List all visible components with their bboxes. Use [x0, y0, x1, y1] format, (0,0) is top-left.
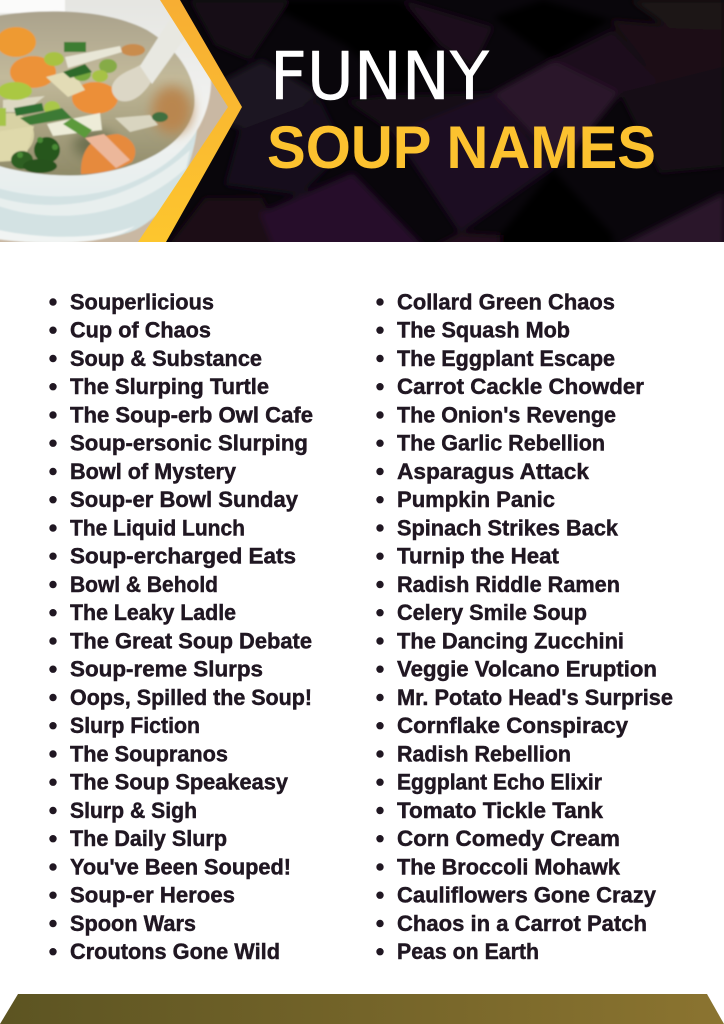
right list column: Radish Riddle Ramen: [397, 572, 620, 597]
left list column: Soup-ersonic Slurping: [70, 431, 308, 456]
left list column: Soup & Substance: [70, 346, 262, 371]
left list column: Cup of Chaos: [70, 318, 211, 343]
right list column: Cornflake Conspiracy: [397, 713, 629, 738]
left list column: [49, 290, 313, 964]
spoon: [110, 64, 151, 102]
left list column: Soup-ercharged Eats: [70, 544, 296, 569]
bowl lower body: [0, 130, 197, 241]
right list column: Carrot Cackle Chowder: [397, 374, 644, 399]
carrot slices: [0, 27, 36, 57]
right list column: [376, 290, 673, 964]
right list column: Mr. Potato Head's Surprise: [397, 685, 673, 710]
right list column: Collard Green Chaos: [397, 290, 615, 314]
right list column: Tomato Tickle Tank: [397, 798, 604, 823]
left list column: Bowl of Mystery: [70, 459, 237, 484]
cabbage pieces: [65, 46, 122, 68]
parsley: [11, 137, 60, 173]
right list column: Cauliflowers Gone Crazy: [397, 883, 657, 908]
right list column: Corn Comedy Cream: [397, 826, 620, 851]
right list column: The Dancing Zucchini: [397, 628, 624, 654]
right list column: The Squash Mob: [397, 318, 570, 343]
right list column: Radish Rebellion: [397, 742, 571, 766]
broth: [0, 11, 195, 175]
right list column: Asparagus Attack: [397, 459, 590, 484]
left list column: The Liquid Lunch: [70, 516, 245, 540]
title: Funny: FUNNY: [270, 38, 490, 115]
left list column: Oops, Spilled the Soup!: [70, 685, 312, 710]
left list column: Soup-er Heroes: [70, 883, 235, 908]
yellow chevron: [138, 0, 242, 242]
right list column: Peas on Earth: [397, 939, 539, 964]
left list column: The Soupranos: [70, 742, 228, 766]
green onions: [64, 42, 86, 52]
tabletop: [0, 79, 228, 242]
left list column: Croutons Gone Wild: [70, 939, 280, 964]
left list column: The Leaky Ladle: [70, 600, 236, 625]
footer band: [0, 994, 724, 1024]
left list column: The Soup Speakeasy: [70, 770, 289, 795]
left list column: Bowl & Behold: [70, 572, 218, 597]
right list column: The Onion's Revenge: [397, 402, 616, 428]
left list column: Slurp Fiction: [70, 713, 200, 738]
bowl rim: [0, 0, 211, 196]
right list column: Turnip the Heat: [397, 544, 560, 569]
left list column: The Soup-erb Owl Cafe: [70, 402, 313, 428]
top left highlight: [0, 0, 65, 13]
left list column: Soup-er Bowl Sunday: [70, 487, 299, 512]
right list column: Celery Smile Soup: [397, 600, 587, 625]
right list column: Pumpkin Panic: [397, 487, 555, 512]
right list column: The Eggplant Escape: [397, 346, 615, 371]
dark faceted background: [140, 0, 724, 250]
soup bowl photo: [0, 0, 245, 247]
right list column: The Broccoli Mohawk: [397, 854, 621, 880]
left list column: The Great Soup Debate: [70, 628, 312, 654]
right list column: The Garlic Rebellion: [397, 431, 605, 456]
left list column: Slurp & Sigh: [70, 798, 197, 823]
right list column: Eggplant Echo Elixir: [397, 770, 602, 795]
right list column: Veggie Volcano Eruption: [397, 657, 657, 682]
left list column: Soup-reme Slurps: [70, 657, 263, 682]
left list column: Souperlicious: [70, 290, 214, 314]
left list column: The Daily Slurp: [70, 826, 227, 851]
left list column: You've Been Souped!: [70, 854, 291, 880]
left list column: Spoon Wars: [70, 911, 196, 936]
title: Soup Names: SOUP NAMES: [267, 114, 656, 181]
right list column: Chaos in a Carrot Patch: [397, 911, 647, 936]
left list column: The Slurping Turtle: [70, 374, 269, 399]
header banner: [0, 0, 724, 250]
right list column: Spinach Strikes Back: [397, 516, 619, 540]
